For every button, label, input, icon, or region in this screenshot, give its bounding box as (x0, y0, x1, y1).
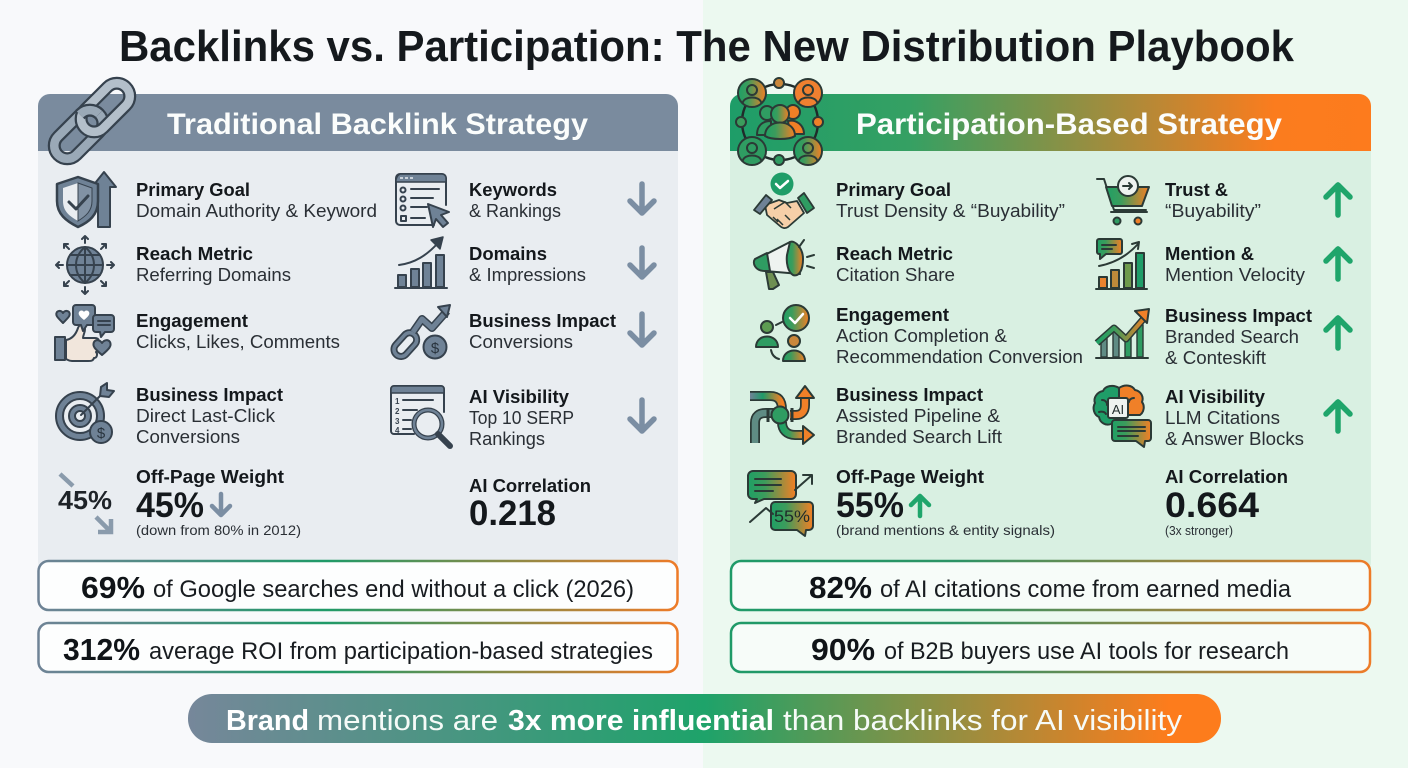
arrow: up (1326, 185, 1350, 215)
row: ai visibility (1094, 386, 1350, 449)
row: business impact: Conversions (136, 426, 240, 447)
icon: serp window with magnifier: 1 (395, 397, 400, 406)
arrow: up (1326, 402, 1350, 431)
banner: key takeaway: Brand (226, 705, 309, 737)
row: ai correlation (1165, 466, 1288, 538)
row: ai visibility: AI Visibility (1165, 386, 1266, 407)
row: off-page weight: 45% (136, 486, 204, 525)
row: off-page weight: Off-Page Weight (136, 466, 284, 487)
icon: target with dollar (56, 383, 114, 443)
arrow: down (630, 184, 654, 213)
row: primary goal (754, 172, 1065, 228)
callout: 82 percent: of AI citations come from earned media (880, 576, 1292, 603)
row: trust and buyability (1097, 176, 1350, 224)
banner: key takeaway: mentions are (317, 705, 498, 737)
icon: globe with arrows (56, 236, 114, 294)
row: ai correlation: AI Correlation (1165, 466, 1288, 487)
row: branded search: Branded Search (1165, 326, 1299, 347)
icon: ai brain with chat: AI (1112, 402, 1124, 417)
icon: thumbs up with hearts (55, 305, 114, 361)
icon: people with check (756, 305, 809, 361)
row: business impact: Direct Last-Click (136, 405, 276, 426)
row: engagement: Recommendation Conversion (836, 346, 1083, 367)
row: branded search (1096, 305, 1350, 368)
icon: chat and rising bars (1096, 239, 1147, 289)
row: reach metric: Citation Share (836, 264, 955, 285)
row: domains (395, 237, 654, 288)
row: off-page weight: (down from 80% in 2012) (136, 522, 301, 538)
row: domains: & Impressions (469, 264, 586, 285)
panel: traditional backlink strategy (38, 78, 678, 574)
row: reach metric: Reach Metric (836, 243, 953, 264)
icon: serp window with magnifier (391, 386, 450, 446)
panel header: participation: Participation-Based Strategy (856, 108, 1282, 141)
row: business impact: Assisted Pipeline & (836, 405, 1001, 426)
row: mention velocity: Mention & (1165, 243, 1254, 264)
row: primary goal: Domain Authority & Keyword (136, 200, 377, 221)
icon: megaphone (754, 240, 814, 289)
callout: 90 percent: of B2B buyers use AI tools for research (884, 638, 1289, 665)
icon: shopping cart (1097, 176, 1149, 224)
row: branded search: Business Impact (1165, 305, 1312, 326)
row: branded search: & Conteskift (1165, 347, 1266, 368)
row: ai visibility: Rankings (469, 428, 545, 449)
banner: key takeaway: than backlinks for AI visibility (783, 705, 1183, 737)
icon: handshake with check (754, 172, 814, 228)
icon: chart with rising arrow (1096, 309, 1149, 358)
callout: 69 percent (38, 561, 678, 610)
icon: ai brain with chat (1094, 386, 1151, 447)
title: Backlinks vs. Participation: The New Distribution Playbook (119, 22, 1295, 71)
row: domains: Domains (469, 243, 547, 264)
row: keywords: & Rankings (469, 200, 561, 221)
row: trust and buyability: Trust & (1165, 179, 1228, 200)
row: engagement (55, 305, 340, 361)
row: engagement: Engagement (836, 304, 949, 325)
row: off-page weight (58, 466, 301, 538)
row: ai visibility: LLM Citations (1165, 407, 1280, 428)
row: business impact: Business Impact (836, 384, 983, 405)
row: off-page weight: (brand mentions & entity signals) (836, 522, 1055, 538)
row: business impact conversions: Conversions (469, 331, 573, 352)
panel header: traditional (38, 94, 678, 151)
row: off-page weight (748, 466, 1055, 538)
icon: chat bubbles 55 percent (748, 471, 813, 536)
row: reach metric (754, 240, 955, 289)
row: business impact conversions: Business Impact (469, 310, 616, 331)
row: business impact (750, 384, 1002, 447)
panel: participation-based strategy (730, 78, 1371, 574)
icon: 45 percent with arrows (58, 474, 112, 532)
row: mention velocity: Mention Velocity (1165, 264, 1306, 285)
row: engagement: Action Completion & (836, 325, 1008, 346)
row: ai visibility: Top 10 SERP (469, 407, 574, 428)
row: ai visibility: & Answer Blocks (1165, 428, 1304, 449)
arrow: down (630, 314, 654, 345)
callout: 82 percent (731, 561, 1370, 610)
icon: small up arrow (911, 496, 929, 516)
banner: key takeaway: 3x more influential (508, 705, 774, 737)
callout: 312 percent: 312% (63, 632, 140, 667)
callout: 90 percent (731, 623, 1370, 672)
panel header: traditional: Traditional Backlink Strategy (167, 108, 588, 141)
icon: chain arrow and coin: $ (431, 340, 440, 357)
arrow: up (1326, 318, 1350, 348)
row: ai correlation: AI Correlation (469, 475, 591, 496)
row: engagement: Engagement (136, 310, 248, 331)
row: business impact (56, 383, 283, 447)
icon: chain arrow and coin (391, 305, 450, 359)
icon: serp window with magnifier: 3 (395, 417, 400, 426)
row: business impact conversions (391, 305, 654, 359)
icon: serp window with magnifier: 4 (395, 426, 400, 435)
icon: pipes (750, 386, 814, 444)
row: mention velocity (1096, 239, 1350, 289)
icon: small down arrow (212, 494, 230, 515)
row: primary goal: Primary Goal (836, 179, 951, 200)
arrow: up (1326, 249, 1350, 279)
callout: 90 percent: 90% (811, 632, 875, 667)
callout: 82 percent: 82% (809, 570, 872, 605)
row: primary goal: Primary Goal (136, 179, 250, 200)
row: engagement (756, 304, 1083, 367)
callout: 312 percent: average ROI from participation-based strategies (149, 638, 653, 665)
row: ai correlation (469, 475, 591, 533)
icon: 45 percent with arrows: 45% (58, 485, 112, 515)
icon: growth bars (395, 237, 447, 288)
icon: people network (736, 78, 823, 165)
row: off-page weight: 55% (836, 486, 904, 525)
row: ai correlation: 0.664 (1165, 486, 1260, 525)
icon: keyword list with cursor (396, 174, 449, 227)
icon: shield with arrow (57, 172, 116, 227)
icon: target with dollar: $ (97, 425, 106, 442)
row: keywords: Keywords (469, 179, 557, 200)
icon: chat bubbles 55 percent: 55% (774, 507, 810, 526)
panel header: participation (730, 94, 1371, 151)
row: trust and buyability: “Buyability” (1165, 200, 1261, 221)
arrow: down (630, 400, 654, 431)
callout: 312 percent (38, 623, 678, 672)
row: reach metric: Referring Domains (136, 264, 291, 285)
row: engagement: Clicks, Likes, Comments (136, 331, 340, 352)
row: business impact: Branded Search Lift (836, 426, 1002, 447)
row: ai correlation: (3x stronger) (1165, 524, 1233, 538)
arrow: down (630, 248, 654, 277)
icon: serp window with magnifier: 2 (395, 407, 400, 416)
row: ai visibility (391, 386, 654, 449)
callout: 69 percent: 69% (81, 570, 145, 605)
row: ai correlation: 0.218 (469, 494, 556, 533)
callout: 69 percent: of Google searches end without a click (2026) (153, 576, 634, 603)
row: business impact: Business Impact (136, 384, 283, 405)
row: ai visibility: AI Visibility (469, 386, 570, 407)
row: off-page weight: Off-Page Weight (836, 466, 984, 487)
banner: key takeaway (188, 694, 1221, 743)
row: primary goal: Trust Density & “Buyability” (836, 200, 1065, 221)
row: reach metric: Reach Metric (136, 243, 253, 264)
icon: chain link (49, 78, 135, 164)
row: keywords (396, 174, 654, 227)
row: primary goal (57, 172, 377, 227)
row: reach metric (56, 236, 291, 294)
